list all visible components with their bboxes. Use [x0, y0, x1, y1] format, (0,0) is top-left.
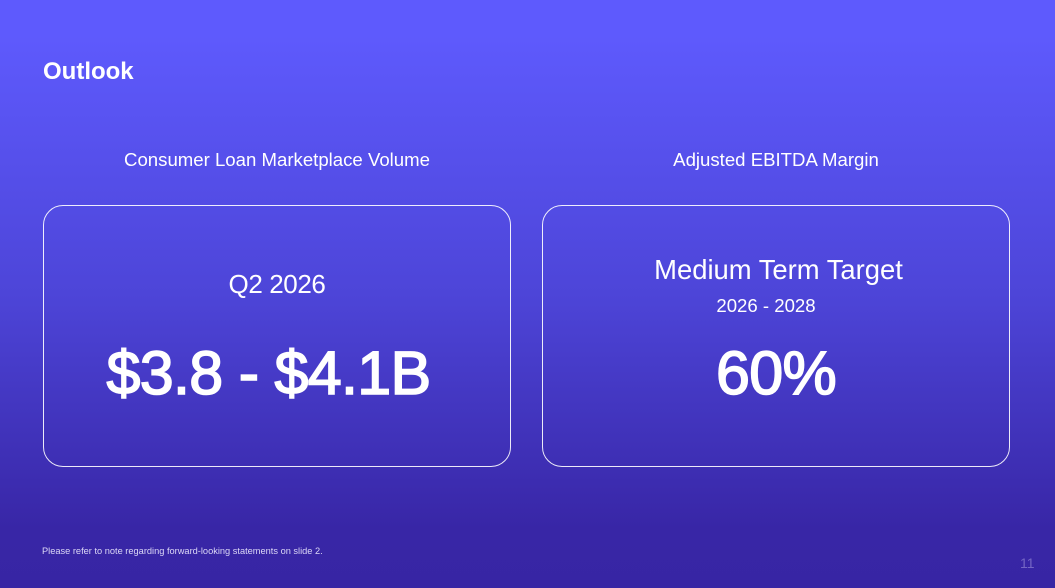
- heading: consumer loan marketplace volume: Consumer Loan Marketplace Volume: [124, 149, 430, 170]
- heading: adjusted EBITDA margin: Adjusted EBITDA Margin: [673, 149, 879, 170]
- target label: Medium Term Target: [654, 254, 903, 285]
- panel: adjusted EBITDA margin: [542, 205, 1010, 467]
- title: Outlook: [43, 58, 134, 85]
- margin value: 60%: [716, 339, 836, 407]
- target years: 2026 - 2028: [716, 295, 816, 316]
- volume value: $3.8 - $4.1B: [107, 339, 430, 407]
- period label: Q2 2026: [229, 269, 325, 299]
- panel: consumer loan volume: [43, 205, 511, 467]
- page number: 11: [1020, 555, 1035, 571]
- footnote: Please refer to note regarding forward-looking statements on slide 2.: [42, 546, 323, 556]
